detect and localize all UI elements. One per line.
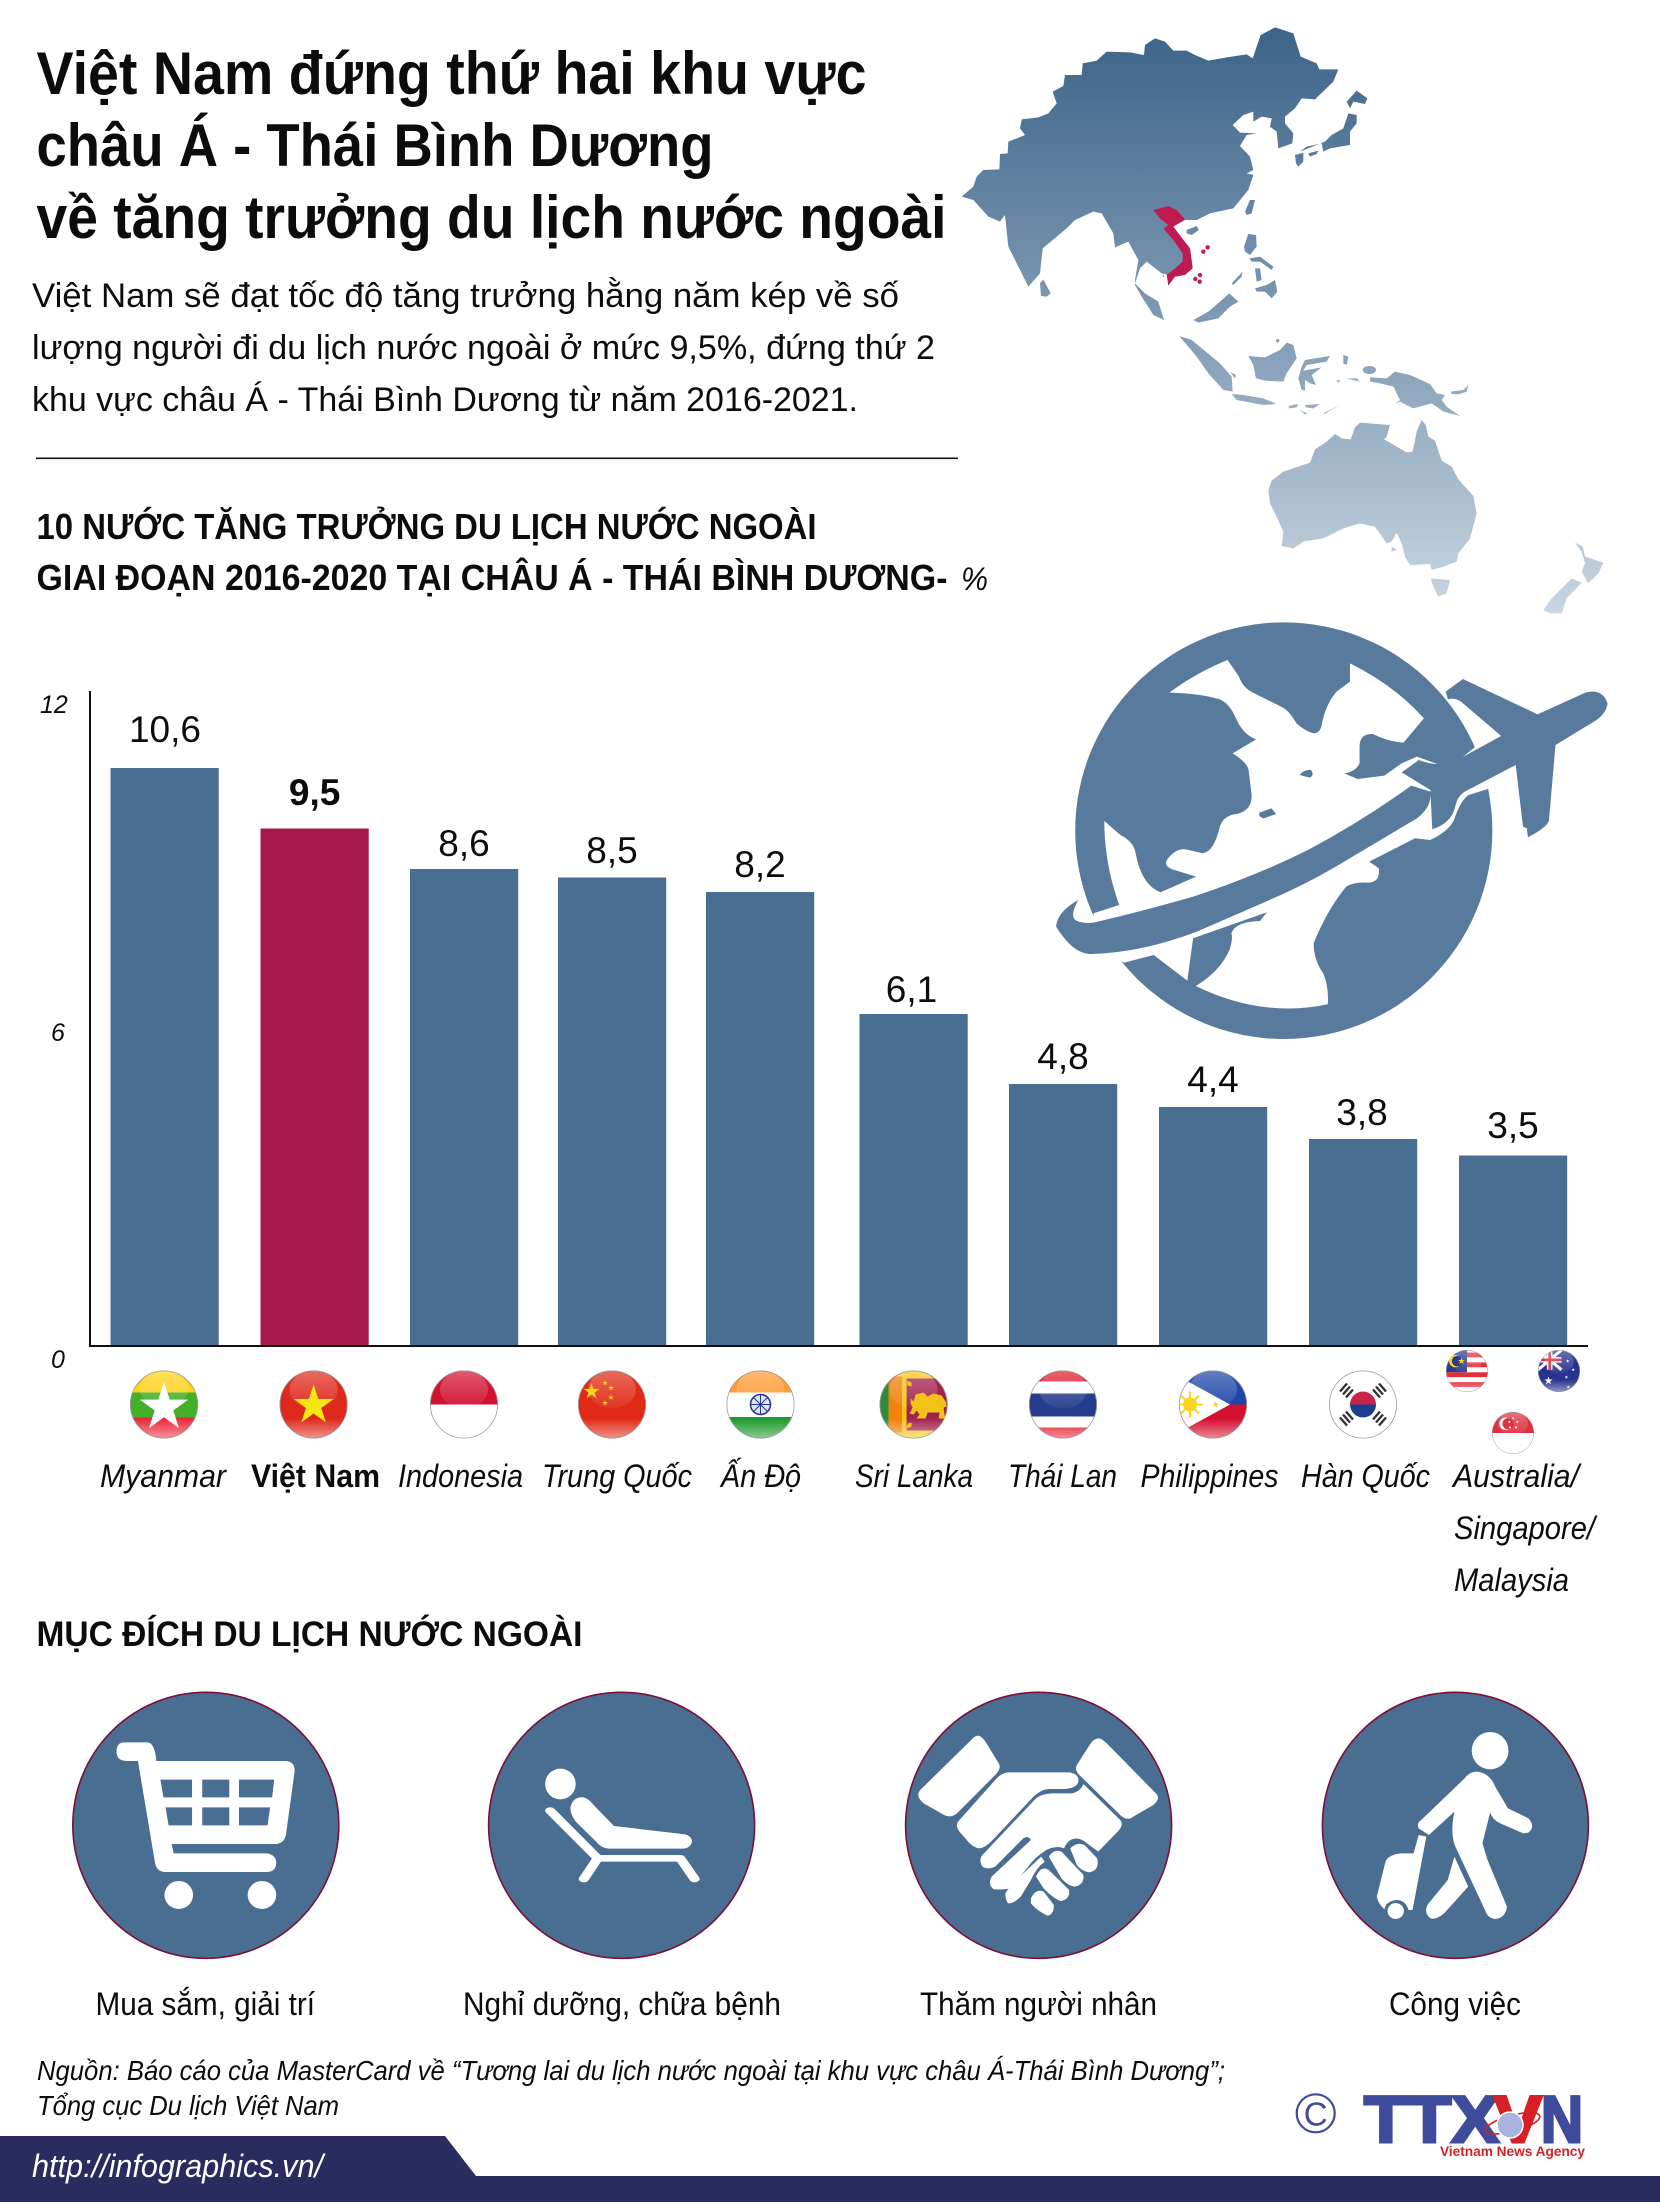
- logo: TTXVN: N: [1541, 2082, 1583, 2156]
- icon: globe and airplane: [1056, 622, 1608, 1039]
- intro text: Việt Nam sẽ đạt tốc độ tăng trưởng hằng năm kép về số: [32, 277, 899, 315]
- caption: Nghỉ dưỡng, chữa bệnh: [463, 1986, 781, 2022]
- country labels: Singapore/: [1454, 1510, 1598, 1546]
- title: về tăng trưởng du lịch nước ngoài: [36, 184, 946, 251]
- bar values: 8,6: [438, 823, 490, 864]
- footer band: [0, 2136, 1660, 2202]
- flag: China: [578, 1370, 646, 1438]
- country labels: [100, 1458, 1598, 1598]
- chart heading: GIAI ĐOẠN 2016-2020 TẠI CHÂU Á - THÁI BÌNH DƯƠNG-: [36, 556, 948, 598]
- country labels: Việt Nam: [251, 1458, 380, 1494]
- flag: Vietnam: [280, 1370, 348, 1438]
- intro text: [32, 277, 935, 419]
- y axis labels: 6: [51, 1019, 65, 1047]
- bar values: 9,5: [289, 772, 340, 813]
- panel: resort and medical: [463, 1692, 781, 2022]
- chart heading: %: [961, 561, 988, 597]
- logo: TTXVN: TTX: [1364, 2082, 1499, 2156]
- Indonesia and New Guinea: [1179, 293, 1468, 416]
- flag: South Korea: [1329, 1370, 1397, 1438]
- flag: Myanmar: [130, 1370, 198, 1438]
- section heading: travel purposes: MỤC ĐÍCH DU LỊCH NƯỚC NGOÀI: [36, 1614, 582, 1654]
- bar values: 6,1: [886, 969, 937, 1010]
- bar values: 4,4: [1187, 1059, 1239, 1100]
- panel: work: [1322, 1692, 1588, 2022]
- map: Asia-Pacific with Vietnam highlighted: [962, 27, 1603, 613]
- caption: Mua sắm, giải trí: [96, 1986, 315, 2022]
- footer URL: http://infographics.vn/: [32, 2148, 326, 2184]
- bar values: 10,6: [129, 709, 201, 750]
- intro text: khu vực châu Á - Thái Bình Dương từ năm 2016-2021.: [32, 381, 858, 419]
- flag: Thailand: [1029, 1370, 1097, 1438]
- country labels: Indonesia: [398, 1458, 523, 1494]
- icon: shopping cart: [117, 1742, 295, 1909]
- country labels: Philippines: [1140, 1458, 1278, 1494]
- country labels: Ấn Độ: [719, 1458, 801, 1494]
- bar values: 3,8: [1336, 1092, 1388, 1133]
- Australia and New Zealand: [1268, 420, 1603, 613]
- panel: shopping and entertainment: [73, 1692, 339, 2022]
- flag: Indonesia: [430, 1370, 498, 1438]
- country labels: Malaysia: [1454, 1562, 1569, 1598]
- bar values: 8,2: [734, 844, 786, 885]
- flag: Malaysia: [1446, 1350, 1488, 1392]
- bar chart: outbound travel growth: [40, 691, 1588, 1374]
- title: châu Á - Thái Bình Dương: [36, 112, 714, 179]
- logo: TTXVN: [1297, 2082, 1585, 2159]
- chart heading: [36, 505, 988, 598]
- country labels: Sri Lanka: [855, 1458, 973, 1494]
- icon: traveller with suitcase: [1377, 1732, 1532, 1919]
- flag: Sri Lanka: [880, 1370, 949, 1438]
- flag: India: [726, 1370, 794, 1438]
- flag: Philippines: [1177, 1370, 1247, 1438]
- source note: Tổng cục Du lịch Việt Nam: [37, 2090, 339, 2121]
- bar values: 4,8: [1037, 1036, 1089, 1077]
- icon: lounge chair: [545, 1769, 695, 1879]
- country labels: Hàn Quốc: [1301, 1458, 1430, 1494]
- country labels: Myanmar: [100, 1458, 227, 1494]
- source note: Nguồn: Báo cáo của MasterCard về “Tương lai du lịch nước ngoài tại khu vực châu Á-Thái Bình Dương”;: [37, 2055, 1225, 2086]
- panel: visiting relatives: [906, 1692, 1172, 2022]
- chart heading: 10 NƯỚC TĂNG TRƯỞNG DU LỊCH NƯỚC NGOÀI: [36, 505, 816, 547]
- title: [36, 40, 946, 251]
- logo: TTXVN: Vietnam News Agency: [1440, 2143, 1585, 2159]
- country labels: Thái Lan: [1008, 1458, 1117, 1494]
- logo: TTXVN: C: [1304, 2096, 1328, 2132]
- y axis labels: [40, 691, 68, 1374]
- y axis labels: 0: [51, 1346, 65, 1374]
- title: Việt Nam đứng thứ hai khu vực: [36, 40, 866, 107]
- caption: Công việc: [1389, 1986, 1521, 2022]
- bars: [110, 768, 1567, 1346]
- flag: Singapore: [1492, 1412, 1534, 1454]
- icon: handshake: [918, 1736, 1158, 1916]
- country labels: Australia/: [1451, 1458, 1582, 1494]
- caption: Thăm người nhân: [920, 1986, 1157, 2022]
- bar values: 8,5: [586, 830, 638, 871]
- country labels: Trung Quốc: [542, 1458, 692, 1494]
- bar values: 3,5: [1487, 1105, 1539, 1146]
- logo: TTXVN: V: [1494, 2082, 1542, 2156]
- source note: [37, 2055, 1225, 2121]
- flag: Australia: [1538, 1350, 1580, 1392]
- y axis labels: 12: [40, 691, 68, 719]
- mainland Asia and northern islands: [962, 27, 1367, 320]
- bar values: [129, 709, 1539, 1146]
- intro text: lượng người đi du lịch nước ngoài ở mức 9,5%, đứng thứ 2: [32, 329, 935, 367]
